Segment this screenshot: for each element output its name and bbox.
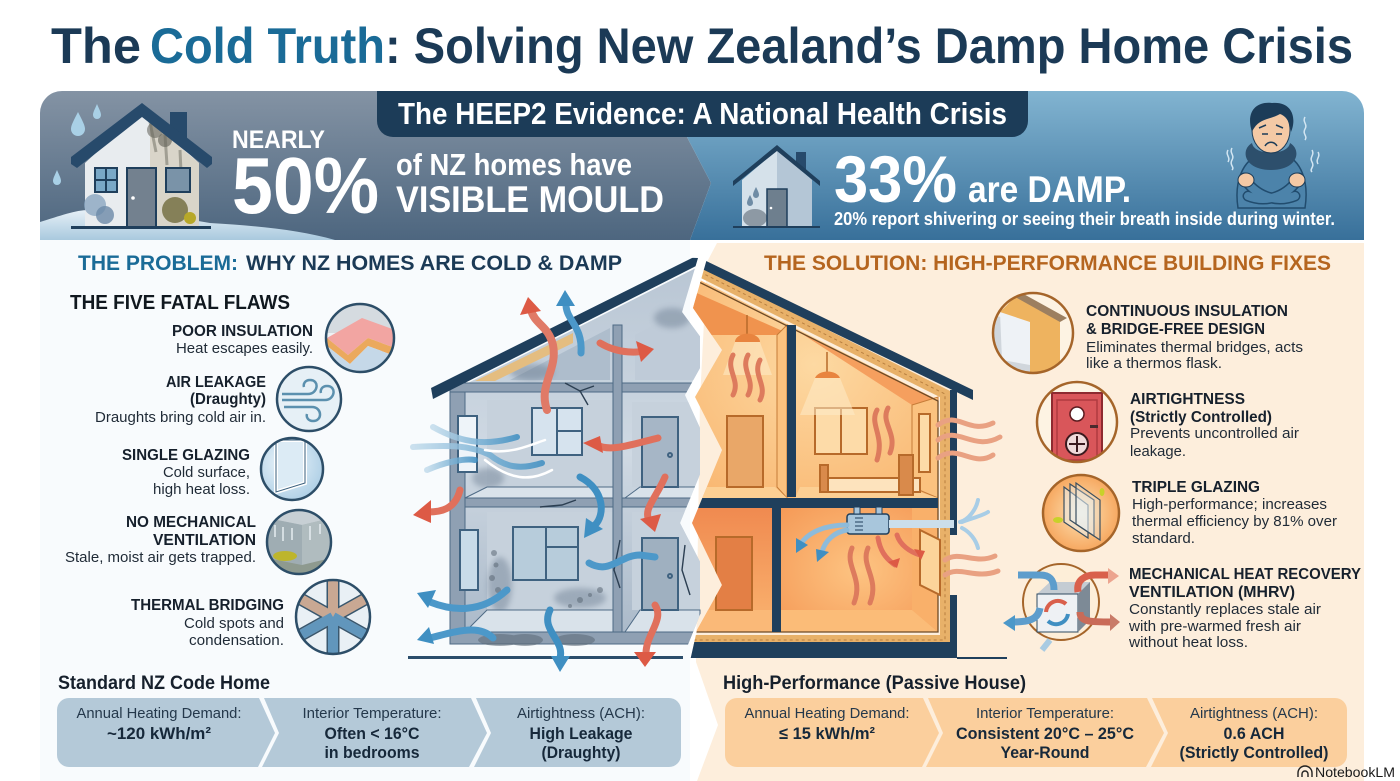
process bar passive house <box>725 698 1347 767</box>
roof and shell <box>690 258 1007 659</box>
flaw: no mechanical ventilation: VENTILATION <box>153 532 256 549</box>
illustration: warm house cross-section <box>690 258 1007 659</box>
subheading: five fatal flaws: THE FIVE FATAL FLAWS <box>70 292 290 314</box>
flaw: air leakage <box>95 367 341 431</box>
stat: airtightness standard <box>517 705 645 762</box>
duct air arrows <box>800 525 920 565</box>
icon: thermal bridge <box>296 578 370 656</box>
title: Cold Truth <box>150 18 385 74</box>
solution: MHRV: without heat loss. <box>1128 634 1248 651</box>
solution: MHRV: with pre-warmed fresh air <box>1128 618 1301 635</box>
exhaust and heat outside warm house <box>938 420 1000 575</box>
icon: shivering person <box>1227 103 1319 208</box>
stat: interior temperature standard: in bedrooms <box>324 743 420 762</box>
process bar standard <box>57 698 681 767</box>
heading: the problem: THE PROBLEM: <box>78 252 238 275</box>
warm house upper rooms <box>690 275 938 498</box>
room side walls <box>777 325 938 498</box>
flaw: thermal bridging: THERMAL BRIDGING <box>131 597 284 614</box>
solution: triple glazing: standard. <box>1132 530 1195 547</box>
flaw: single glazing: SINGLE GLAZING <box>122 447 250 464</box>
solution: continuous insulation <box>990 292 1303 375</box>
icon: single glazed window <box>261 438 323 500</box>
crossed arms <box>1244 178 1299 199</box>
cold house body <box>450 266 700 643</box>
stat: airtightness passive: Airtightness (ACH): <box>1190 705 1318 722</box>
solution: triple glazing: thermal efficiency by 81% over <box>1132 513 1337 530</box>
solution: airtightness: (Strictly Controlled) <box>1130 409 1272 426</box>
solution: airtightness: Prevents uncontrolled air <box>1130 425 1299 442</box>
stat: interior temperature passive: Consistent 20°C – 25°C <box>956 724 1134 743</box>
flaw: single glazing: Cold surface, <box>163 464 250 481</box>
comparison: standard NZ code home: Standard NZ Code Home <box>58 673 270 694</box>
flaw: poor insulation <box>172 303 395 372</box>
sweater <box>1237 153 1306 208</box>
air leak arrows <box>413 303 665 658</box>
stat: interior temperature standard: Often < 16°C <box>324 724 420 743</box>
damp patches <box>472 308 690 613</box>
stat: interior temperature passive: Interior Temperature: <box>976 705 1114 722</box>
icon: insulated wall <box>990 292 1073 375</box>
flaw: thermal bridging: condensation. <box>189 632 284 649</box>
stat: interior temperature standard <box>302 705 442 762</box>
icon: triple glazing <box>1043 475 1119 551</box>
panel: problem background <box>40 240 690 781</box>
stat: heating demand passive: Annual Heating Demand: <box>744 705 910 722</box>
solution: MHRV <box>1003 564 1361 651</box>
solution: triple glazing: High-performance; increases <box>1132 496 1327 513</box>
stat: airtightness standard: Airtightness (ACH): <box>517 705 645 722</box>
banner tab heading: The HEEP2 Evidence: A National Health Crisis <box>398 96 1007 131</box>
stat: 33 percent damp: 33% <box>834 142 957 216</box>
mould, cracks <box>478 550 603 646</box>
heading: the problem: WHY NZ HOMES ARE COLD & DAMP <box>246 252 622 275</box>
flaw: single glazing <box>122 438 323 500</box>
stat: interior temperature standard: Interior Temperature: <box>302 705 442 722</box>
heading: the problem <box>78 252 622 275</box>
roof and insulation <box>431 254 700 399</box>
stat: airtightness standard: (Draughty) <box>542 743 620 762</box>
stat: heating demand standard <box>76 705 242 743</box>
solution: airtightness <box>1037 382 1299 465</box>
insulation layer <box>690 272 945 640</box>
stat: airtightness passive: (Strictly Controlled) <box>1180 743 1328 762</box>
banner left half <box>40 91 711 240</box>
stat: nearly 50 percent visible mould: of NZ homes have <box>396 147 632 182</box>
flaw: no mechanical ventilation <box>65 510 331 580</box>
pendant lights <box>723 315 855 415</box>
stat: interior temperature passive: Year-Round <box>1000 743 1090 762</box>
flaw: poor insulation: Heat escapes easily. <box>176 340 313 357</box>
stat: heating demand standard: Annual Heating Demand: <box>76 705 242 722</box>
banner right half <box>687 91 1364 240</box>
stat: nearly 50 percent visible mould <box>232 126 664 230</box>
icon: insulation <box>325 303 395 372</box>
solution: MHRV: VENTILATION (MHRV) <box>1129 584 1295 601</box>
stat: airtightness passive <box>1180 705 1328 762</box>
title: : Solving New Zealand’s Damp Home Crisis <box>385 18 1353 74</box>
comparison: high-performance passive house: High-Performance (Passive House) <box>723 673 1026 694</box>
flaw: no mechanical ventilation: Stale, moist air gets trapped. <box>65 549 256 566</box>
solution: airtightness: AIRTIGHTNESS <box>1130 391 1245 408</box>
flaw: thermal bridging <box>131 578 370 656</box>
scarf <box>1246 143 1296 170</box>
solution: continuous insulation: & BRIDGE-FREE DESIGN <box>1086 321 1265 338</box>
banner tab heading <box>377 91 1028 137</box>
stat: nearly 50 percent visible mould: 50% <box>232 141 379 230</box>
icon: blower door <box>1037 382 1117 465</box>
stat: nearly 50 percent visible mould: NEARLY <box>232 126 325 154</box>
illustration: cold house cross-section <box>408 254 700 672</box>
mhrv unit <box>847 507 954 534</box>
stat: airtightness passive: 0.6 ACH <box>1224 724 1284 743</box>
warm house lower rooms <box>690 508 772 632</box>
solution: continuous insulation: CONTINUOUS INSULATION <box>1086 303 1288 320</box>
panel: solution background <box>696 243 1364 781</box>
cold house floors <box>465 487 700 632</box>
stat: heating demand standard: ~120 kWh/m² <box>107 724 211 743</box>
solution: airtightness: leakage. <box>1130 443 1186 460</box>
flaw: air leakage: (Draughty) <box>190 391 266 408</box>
hands <box>1238 173 1254 187</box>
stat: airtightness standard: High Leakage <box>530 724 632 743</box>
icon: heat recovery unit <box>1003 564 1120 650</box>
stat: nearly 50 percent visible mould: VISIBLE MOULD <box>396 179 664 220</box>
flaw: air leakage: Draughts bring cold air in. <box>95 409 266 426</box>
solution: MHRV: Constantly replaces stale air <box>1129 601 1321 618</box>
heading: the solution: THE SOLUTION: HIGH-PERFORMANCE BUILDING FIXES <box>764 252 1331 275</box>
stat: heating demand passive: ≤ 15 kWh/m² <box>779 724 875 743</box>
stat: 33 percent damp: 20% report shivering or seeing their breath inside during winter. <box>834 208 1335 229</box>
heat waves <box>731 355 892 603</box>
flaw: no mechanical ventilation: NO MECHANICAL <box>126 514 256 531</box>
stat: interior temperature passive <box>956 705 1134 762</box>
comparison: standard NZ code home <box>57 673 681 767</box>
stat: 33 percent damp: are DAMP. <box>968 169 1131 210</box>
icon: wind <box>277 367 341 431</box>
solution: triple glazing <box>1043 475 1337 551</box>
solution: triple glazing: TRIPLE GLAZING <box>1132 479 1260 496</box>
solution: MHRV: MECHANICAL HEAT RECOVERY <box>1129 566 1361 583</box>
cold house back wall shading <box>487 300 700 610</box>
stat: 33 percent damp <box>834 142 1335 229</box>
windows and doors <box>458 408 678 610</box>
flaw: air leakage: AIR LEAKAGE <box>166 374 266 391</box>
face <box>1252 107 1290 153</box>
icon: damp corner <box>267 510 331 580</box>
title: The <box>51 18 141 74</box>
comparison: high-performance passive house <box>723 673 1347 767</box>
flaw: thermal bridging: Cold spots and <box>184 615 284 632</box>
doors and furniture <box>716 408 940 610</box>
solution: continuous insulation: like a thermos flask. <box>1086 355 1222 372</box>
stat: heating demand passive <box>744 705 910 743</box>
flaw: single glazing: high heat loss. <box>153 481 250 498</box>
cold house structure <box>450 325 700 644</box>
flaw: poor insulation: POOR INSULATION <box>172 323 313 340</box>
icon: mouldy house <box>40 103 335 240</box>
icon: damp house <box>733 145 820 228</box>
solution: continuous insulation: Eliminates thermal bridges, acts <box>1086 339 1303 356</box>
notebooklm mark: NotebookLM <box>1315 764 1395 780</box>
banner: HEEP2 evidence <box>40 91 1364 240</box>
